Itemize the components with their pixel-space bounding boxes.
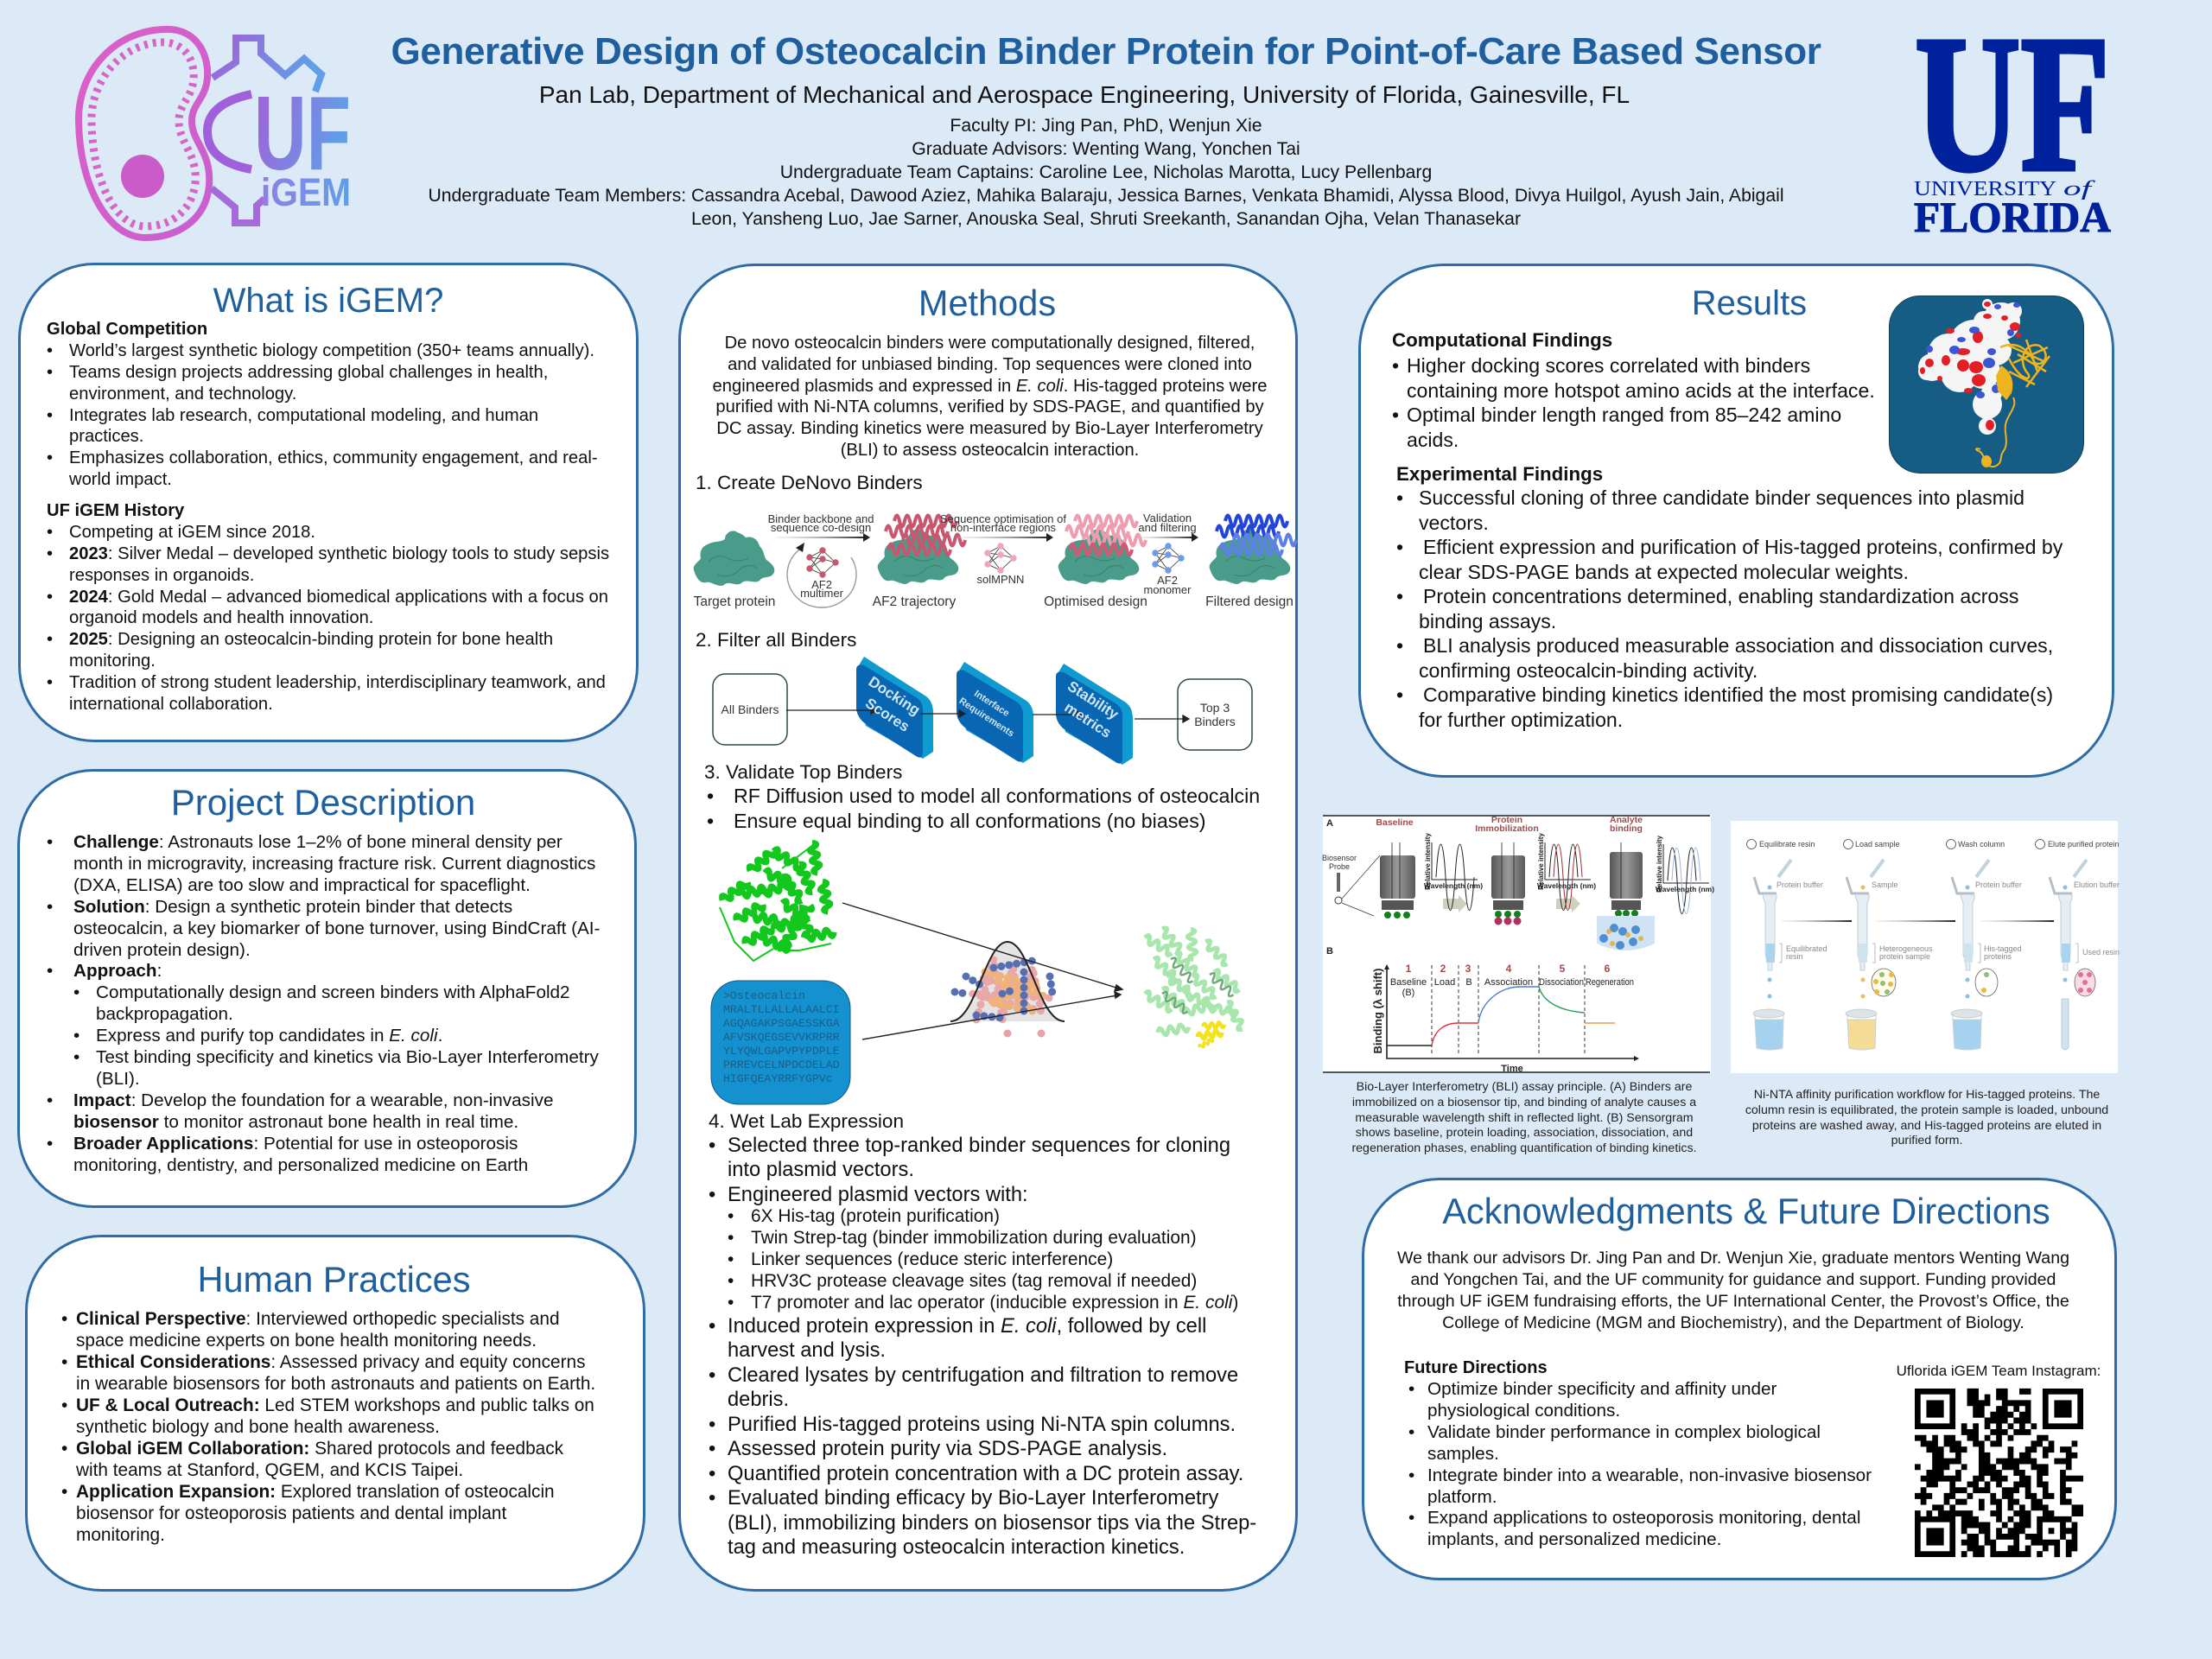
project text: month in microgravity, increasing fracture risk. Current diagnostics [73, 854, 595, 874]
subheading: future directions: Future Directions [1404, 1358, 1548, 1377]
human practices text: Ethical Considerations: Assessed privacy and equity concerns [76, 1352, 585, 1372]
human practices text: Global iGEM Collaboration: Shared protocols and feedback [76, 1439, 563, 1459]
figure: BLI assay principle: B [1465, 977, 1472, 988]
panel: Project Description: • [47, 1134, 53, 1154]
human practices text: with teams at Stanford, QGEM, and KCIS Taipei. [76, 1460, 463, 1480]
list: wet lab steps: Quantified protein concentration with a DC protein assay. [728, 1463, 1243, 1485]
figure: BLI assay principle: Wavelength (nm) [1424, 881, 1483, 890]
project text: backpropagation. [96, 1004, 233, 1024]
figure: BLI assay principle: A [1326, 818, 1333, 829]
list: future directions: Expand applications to osteoporosis monitoring, dental [1427, 1508, 1860, 1528]
human practices text [61, 1309, 595, 1545]
figure: BLI assay principle: Biosensor [1322, 854, 1357, 862]
caption: Ni-NTA: Ni-NTA affinity purification workflow for His-tagged proteins. The [1754, 1088, 2100, 1102]
acknowledgments text: through UF iGEM fundraising efforts, the UF International Center, the Provost’s Office, the [1397, 1292, 2069, 1311]
figure: binder design pipeline: sequence co-design [771, 521, 871, 534]
team credits: Undergraduate Team Captains: Caroline Lee, Nicholas Marotta, Lucy Pellenbarg [780, 162, 1432, 182]
figure: BLI assay principle: Wavelength (nm) [1537, 881, 1596, 890]
figure: BLI assay principle: Relative intensity [1424, 833, 1432, 890]
project text: Test binding specificity and kinetics via Bio-Layer Interferometry [96, 1047, 599, 1067]
subheading: global competition: Global Competition [47, 320, 207, 339]
list: future directions: Validate binder performance in complex biological [1427, 1422, 1821, 1442]
list: computational findings: containing more hotspot amino acids at the interface. [1407, 378, 1875, 401]
project text: (DXA, ELISA) are too slow and impractical for spaceflight. [73, 875, 531, 895]
figure: binder design pipeline [693, 512, 1298, 609]
list: wet lab steps: Evaluated binding efficacy by Bio-Layer Interferometry [728, 1487, 1218, 1510]
figure: Ni-NTA purification workflow [1731, 821, 2118, 1073]
project text: Approach: [73, 961, 162, 981]
figure: BLI assay principle: 6 [1605, 963, 1611, 975]
section: 2 filter binders: 2. Filter all Binders [696, 629, 856, 651]
figure: BLI assay principle: (B) [1402, 988, 1414, 998]
list: computational findings [1407, 353, 1875, 452]
panel: Human Practices: • [61, 1352, 67, 1372]
panel: Results: • [1396, 634, 1403, 657]
panel: What is iGEM: • [47, 544, 53, 563]
figure: binder design pipeline: Binder backbone and [768, 512, 874, 525]
panel: Human Practices: • [61, 1482, 67, 1502]
panel: What is iGEM: • [47, 406, 53, 425]
panel: Acknowledgments and Future Directions: • [1408, 1508, 1414, 1528]
list: wet lab steps: debris. [728, 1389, 789, 1411]
human practices text: Application Expansion: Explored translation of osteocalcin [76, 1482, 555, 1502]
panel: What is iGEM: • [47, 588, 53, 607]
figure: BLI assay principle: Association [1484, 977, 1533, 988]
list: wet lab steps: Assessed protein purity via SDS-PAGE analysis. [728, 1438, 1167, 1460]
panel: Human Practices [25, 1235, 645, 1592]
panel: Human Practices: • [61, 1395, 67, 1415]
project text: driven protein design). [73, 940, 251, 960]
figure: Ni-NTA purification workflow: Equilibrated [1786, 944, 1827, 953]
list: global competition: World’s largest synthetic biology competition (350+ teams annually). [69, 341, 594, 360]
acknowledgments text: We thank our advisors Dr. Jing Pan and Dr. Wenjun Xie, graduate mentors Wenting Wang [1397, 1249, 2069, 1268]
panel: Project Description: • [47, 961, 53, 981]
figure: Ni-NTA purification workflow: His-tagged [1984, 944, 2022, 953]
list: validate bullets: Ensure equal binding to all conformations (no biases) [734, 810, 1206, 832]
figure: structure prediction [709, 834, 1287, 1110]
list: wet lab steps: • [728, 1293, 734, 1313]
panel: Methods [678, 264, 1298, 1592]
list: experimental findings: BLI analysis produced measurable association and dissociation curves, [1423, 634, 2053, 657]
list: experimental findings: for further optimization. [1419, 709, 1623, 731]
figure: binder filter flow: Scores [862, 695, 912, 735]
figure: Ni-NTA purification workflow: Elute purified protein [2048, 840, 2120, 849]
panel: Human Practices: • [61, 1309, 67, 1329]
heading: Methods [918, 283, 1056, 323]
figure: binder design pipeline: Sequence optimisation of [940, 512, 1066, 525]
project text: osteocalcin, a key biomarker of bone turnover, using BindCraft (AI- [73, 918, 600, 938]
team credits: Faculty PI: Jing Pan, PhD, Wenjun Xie [950, 116, 1262, 136]
figure: Ni-NTA purification workflow: protein sample [1879, 952, 1930, 961]
figure: binder filter flow: Binders [1194, 715, 1236, 728]
figure: BLI assay principle: Probe [1329, 862, 1350, 871]
list: global competition: Emphasizes collaboration, ethics, community engagement, and real- [69, 448, 598, 467]
panel: Results: • [1396, 585, 1403, 607]
panel: Results: • [1392, 354, 1399, 377]
project text: • [73, 982, 79, 1002]
caption: BLI [1317, 1080, 1732, 1157]
figure: Ni-NTA purification workflow: Used resin [2082, 948, 2120, 957]
logo: University of Florida: UF [1915, 0, 2110, 212]
panel: Methods: • [709, 1463, 715, 1485]
list: wet lab steps: into plasmid vectors. [728, 1159, 914, 1181]
panel: Project Description [17, 769, 637, 1208]
panel: Methods: • [709, 1364, 715, 1387]
list: future directions: Optimize binder specificity and affinity under [1427, 1379, 1777, 1399]
list: future directions: physiological conditions. [1427, 1401, 1620, 1421]
figure: BLI assay principle: Baseline [1376, 817, 1414, 828]
project text: Impact: Develop the foundation for a wearable, non-invasive [73, 1090, 553, 1110]
acknowledgments text [1362, 1248, 2105, 1334]
project text: monitoring, dentistry, and personalized medicine on Earth [73, 1155, 528, 1175]
human practices text: UF & Local Outreach: Led STEM workshops and public talks on [76, 1395, 594, 1415]
panel: What is iGEM: • [47, 448, 53, 467]
figure: BLI assay principle: Load [1434, 977, 1455, 988]
figure: binder filter flow: metrics [1061, 699, 1115, 741]
figure: BLI assay principle: 5 [1560, 963, 1566, 975]
caption: BLI: Bio-Layer Interferometry (BLI) assay principle. (A) Binders are [1357, 1080, 1692, 1094]
list: history: organoid models and health innovation. [69, 608, 373, 627]
image: protein surface [1889, 296, 2084, 474]
project text [47, 832, 600, 1175]
caption: Ni-NTA [1719, 1088, 2134, 1149]
figure: binder filter flow: Docking [866, 673, 923, 719]
subheading: experimental findings: Experimental Findings [1396, 463, 1603, 485]
figure: binder design pipeline: solMPNN [977, 573, 1024, 586]
figure: binder design pipeline: non-interface regions [950, 521, 1057, 534]
list: history: 2025: Designing an osteocalcin-binding protein for bone health [69, 630, 553, 649]
title: Generative Design of Osteocalcin Binder Protein for Point-of-Care Based Sensor [391, 30, 1821, 73]
list: history: Tradition of strong student leadership, interdisciplinary teamwork, and [69, 673, 606, 692]
team credits: Graduate Advisors: Wenting Wang, Yonchen Tai [912, 139, 1300, 159]
human practices text: monitoring. [76, 1525, 165, 1545]
figure: binder filter flow: Stability [1065, 677, 1122, 723]
figure: BLI assay principle: 2 [1440, 963, 1446, 975]
figure: Ni-NTA purification workflow: Wash column [1958, 840, 2005, 849]
panel: Acknowledgments and Future Directions: • [1408, 1379, 1414, 1399]
list: wet lab steps: HRV3C protease cleavage sites (tag removal if needed) [751, 1271, 1197, 1291]
list: future directions: Integrate binder into a wearable, non-invasive biosensor [1427, 1465, 1872, 1485]
list: future directions [1427, 1379, 1872, 1551]
methods summary: engineered plasmids and expressed in E. coli. His-tagged proteins were [713, 377, 1267, 396]
list: wet lab steps: Selected three top-ranked binder sequences for cloning [728, 1135, 1230, 1157]
project text: biosensor to monitor astronaut bone health in real time. [73, 1112, 518, 1132]
figure: BLI assay principle: Baseline [1390, 977, 1427, 988]
list: validate bullets: RF Diffusion used to model all conformations of osteocalcin [734, 785, 1260, 807]
methods summary: and validated for unbiased binding. Top sequences were cloned into [728, 355, 1252, 374]
heading: Acknowledgments & Future Directions [1442, 1191, 2050, 1231]
human practices text: in wearable biosensors for both astronauts and patients on Earth. [76, 1374, 595, 1394]
logo: University of Florida: FLORIDA [1914, 193, 2111, 241]
panel: Methods: • [709, 1487, 715, 1510]
list: wet lab steps: Induced protein expression in E. coli, followed by cell [728, 1315, 1206, 1338]
list: wet lab steps: • [728, 1228, 734, 1248]
acknowledgments text: and Yongchen Tai, and the UF community for guidance and support. Funding provided [1411, 1270, 2056, 1289]
caption: BLI: measurable wavelength shift in reflected light. (B) Sensorgram [1355, 1111, 1694, 1125]
caption: BLI: regeneration phases, enabling quantification of binding kinetics. [1351, 1141, 1697, 1155]
list: wet lab steps: Purified His-tagged proteins using Ni-NTA spin columns. [728, 1414, 1236, 1436]
list: experimental findings [1419, 486, 2063, 732]
figure: structure prediction: PRREVCELNPDCDELAD [723, 1058, 840, 1071]
list: wet lab steps: tag and measuring osteocalcin interaction kinetics. [728, 1536, 1185, 1559]
methods summary: De novo osteocalcin binders were computationally designed, filtered, [725, 334, 1255, 353]
figure: BLI assay principle: B [1326, 946, 1333, 957]
figure: binder design pipeline: Validation [1143, 512, 1192, 524]
panel: Methods: • [709, 1438, 715, 1460]
list: wet lab steps: Twin Strep-tag (binder immobilization during evaluation) [751, 1228, 1197, 1248]
human practices text: biosensor for osteoporosis patients and dental implant [76, 1503, 506, 1523]
heading: Human Practices [197, 1259, 470, 1300]
figure: binder filter flow: Requirements [957, 696, 1016, 739]
list: history: monitoring. [69, 652, 156, 671]
figure: BLI assay principle: 4 [1506, 963, 1512, 975]
figure: binder design pipeline: Optimised design [1044, 594, 1147, 609]
panel: Methods: • [709, 1184, 715, 1206]
figure: BLI assay principle: Relative intensity [1656, 836, 1663, 893]
methods summary: (BLI) to assess osteocalcin interaction. [841, 441, 1139, 460]
list: validate bullets [707, 785, 1260, 832]
caption: BLI: shows baseline, protein loading, association, dissociation, and [1356, 1126, 1693, 1140]
affiliation: Pan Lab, Department of Mechanical and Aerospace Engineering, University of Florida, Gainesville, FL [539, 81, 1630, 108]
list: wet lab steps: 6X His-tag (protein purification) [751, 1206, 1000, 1226]
figure: Ni-NTA purification workflow: Heterogeneous [1879, 944, 1933, 953]
heading: What is iGEM? [213, 282, 443, 320]
panel: Methods: • [709, 1414, 715, 1436]
panel: Results: • [1392, 404, 1399, 426]
logo: UF iGEM: iGEM [261, 170, 351, 214]
methods summary: DC assay. Binding kinetics were measured by Bio-Layer Interferometry [716, 419, 1263, 438]
panel: What is iGEM [18, 263, 639, 742]
logo: University of Florida: UNIVERSITY [1914, 178, 2056, 200]
panel: What is iGEM: • [47, 673, 53, 692]
section: 3 validate binders: 3. Validate Top Binders [704, 761, 902, 783]
panel: What is iGEM: • [47, 630, 53, 649]
subheading: computational findings: Computational Findings [1392, 329, 1612, 351]
panel: Methods: • [707, 785, 714, 807]
panel: What is iGEM: • [47, 523, 53, 542]
figure: binder design pipeline: Filtered design [1205, 594, 1294, 609]
list: experimental findings: Successful cloning of three candidate binder sequences into plasmid [1419, 486, 2024, 509]
list: computational findings: Optimal binder length ranged from 85–242 amino [1407, 404, 1841, 426]
panel: Project Description: • [47, 1090, 53, 1110]
figure: binder filter flow [712, 657, 1253, 765]
figure: structure prediction: AFVSKQEGSEVVKRPRR [723, 1031, 840, 1044]
panel: Methods: • [709, 1135, 715, 1157]
figure: binder filter flow: Top 3 [1200, 701, 1230, 715]
list: wet lab steps: Cleared lysates by centrifugation and filtration to remove [728, 1364, 1238, 1387]
list: wet lab steps [728, 1134, 1256, 1560]
list: history: international collaboration. [69, 695, 273, 714]
caption: Ni-NTA: purified form. [1891, 1134, 1962, 1147]
caption: BLI: immobilized on a biosensor tip, and binding of analyte causes a [1352, 1096, 1696, 1109]
panel: What is iGEM: • [47, 363, 53, 382]
list: future directions: platform. [1427, 1487, 1497, 1507]
list: wet lab steps: • [728, 1206, 734, 1226]
heading: Results [1692, 284, 1807, 322]
list: experimental findings: Efficient expression and purification of His-tagged proteins, confirmed by [1423, 536, 2063, 558]
figure: binder design pipeline: Target protein [694, 594, 775, 609]
figure: BLI assay principle: Protein [1491, 815, 1522, 825]
project text: • [73, 1026, 79, 1046]
list: global competition: Teams design projects addressing global challenges in health, [69, 363, 548, 382]
project text: • [73, 1047, 79, 1067]
list: wet lab steps: T7 promoter and lac operator (inducible expression in E. coli) [751, 1293, 1238, 1313]
figure: BLI assay principle: Wavelength (nm) [1656, 885, 1714, 893]
figure: BLI assay principle: 3 [1465, 963, 1471, 975]
figure: structure prediction: MRALTLLALLALAALCI [723, 1003, 840, 1016]
list: history: 2023: Silver Medal – developed synthetic biology tools to study sepsis [69, 544, 609, 563]
figure: structure prediction: YLYQWLGAPVPYPDPLE [723, 1045, 840, 1058]
list: wet lab steps: • [728, 1271, 734, 1291]
figure: binder design pipeline: AF2 [1157, 574, 1178, 587]
list: global competition: environment, and technology. [69, 385, 296, 404]
figure: Ni-NTA purification workflow: Protein buffer [1975, 880, 2022, 889]
QR code [1914, 1389, 2084, 1557]
figure: BLI assay principle [1323, 815, 1711, 1073]
figure: binder filter flow: All Binders [721, 702, 779, 716]
acknowledgments text: College of Medicine (MGM and Biochemistry), and the Department of Biology. [1442, 1313, 2024, 1332]
list: future directions: samples. [1427, 1444, 1499, 1464]
project text: Challenge: Astronauts lose 1–2% of bone mineral density per [73, 832, 563, 852]
list: wet lab steps: • [728, 1249, 734, 1269]
team credits [428, 116, 1784, 229]
caption: Ni-NTA: proteins are washed away, and His-tagged proteins are eluted in [1752, 1119, 2101, 1133]
logo: University of Florida [1914, 0, 2112, 241]
figure: Ni-NTA purification workflow: proteins [1984, 952, 2012, 961]
list: experimental findings: Comparative binding kinetics identified the most promising candidate(s) [1423, 683, 2053, 706]
human practices text: Clinical Perspective: Interviewed orthopedic specialists and [76, 1309, 560, 1329]
list: computational findings: Higher docking scores correlated with binders [1407, 354, 1810, 377]
project text: Computationally design and screen binders with AlphaFold2 [96, 982, 570, 1002]
figure: structure prediction: HIGFQEAYRRFYGPVc [723, 1072, 833, 1085]
methods summary: purified with Ni-NTA columns, verified by SDS-PAGE, and quantified by [715, 397, 1264, 416]
project text: Solution: Design a synthetic protein binder that detects [73, 897, 512, 917]
subheading: UF iGEM history: UF iGEM History [47, 501, 184, 520]
human practices text: synthetic biology and bone health awareness. [76, 1417, 440, 1437]
figure: structure prediction: >Osteocalcin [723, 989, 805, 1002]
project text: (BLI). [96, 1069, 140, 1089]
panel: Project Description: • [47, 897, 53, 917]
figure: binder design pipeline: AF2 trajectory [873, 594, 956, 609]
list: wet lab steps: harvest and lysis. [728, 1339, 886, 1362]
list: global competition: Integrates lab research, computational modeling, and human [69, 406, 538, 425]
heading: Project Description [171, 782, 475, 823]
section: 1 create binders: 1. Create DeNovo Binders [696, 472, 923, 493]
list: global competition: world impact. [69, 470, 172, 489]
figure: binder design pipeline: and filtering [1138, 521, 1197, 534]
figure: binder design pipeline: multimer [800, 587, 844, 600]
figure: Ni-NTA purification workflow: Load sample [1855, 840, 1900, 849]
list: wet lab steps: Engineered plasmid vectors with: [728, 1184, 1028, 1206]
panel: Human Practices: • [61, 1439, 67, 1459]
list: wet lab steps: Linker sequences (reduce steric interference) [751, 1249, 1113, 1269]
list: history: Competing at iGEM since 2018. [69, 523, 315, 542]
figure: Ni-NTA purification workflow: resin [1786, 952, 1803, 961]
list: experimental findings: clear SDS-PAGE bands at expected molecular weights. [1419, 560, 1909, 582]
figure: binder design pipeline: monomer [1144, 583, 1192, 596]
team credits: Leon, Yansheng Luo, Jae Sarner, Anouska Seal, Shruti Sreekanth, Sanandan Ojha, Velan Thanasekar [691, 209, 1521, 229]
figure: BLI assay principle: Analyte [1610, 815, 1643, 825]
logo: UF iGEM [75, 26, 351, 241]
figure: structure prediction: AGQAGAKPSGAESSKGA [723, 1017, 840, 1030]
list: experimental findings: Protein concentrations determined, enabling standardization across [1423, 585, 2018, 607]
panel: Results: • [1396, 536, 1403, 558]
figure: BLI assay principle: Time [1501, 1064, 1523, 1074]
list: experimental findings: vectors. [1419, 512, 1489, 534]
figure: Ni-NTA purification workflow: Elution buffer [2074, 880, 2120, 889]
section: 4 wet lab: 4. Wet Lab Expression [709, 1110, 904, 1132]
project text: Broader Applications: Potential for use in osteoporosis [73, 1134, 518, 1154]
panel: Acknowledgments and Future Directions: • [1408, 1465, 1414, 1485]
list: future directions: implants, and personalized medicine. [1427, 1529, 1721, 1549]
figure: BLI assay principle: Binding (λ shift) [1371, 969, 1384, 1053]
list: history: responses in organoids. [69, 566, 254, 585]
panel: Project Description: • [47, 832, 53, 852]
figure: binder design pipeline: AF2 [811, 578, 832, 591]
methods summary [713, 334, 1267, 460]
panel: Results: • [1396, 486, 1403, 509]
figure: BLI assay principle: 1 [1406, 963, 1412, 975]
list: wet lab steps: (BLI), immobilizing binders on biosensor tips via the Strep- [728, 1512, 1256, 1535]
figure: BLI assay principle: Dissociation [1539, 977, 1584, 988]
panel: Methods: • [707, 810, 714, 832]
figure: BLI assay principle: Immobilization [1475, 823, 1539, 834]
figure: Ni-NTA purification workflow: Equilibrate resin [1759, 840, 1815, 849]
panel: What is iGEM: • [47, 341, 53, 360]
caption: Ni-NTA: column resin is equilibrated, the protein sample is loaded, unbound [1745, 1103, 2108, 1117]
project text: Express and purify top candidates in E. coli. [96, 1026, 442, 1046]
instagram label: Uflorida iGEM Team Instagram: [1897, 1363, 2101, 1379]
figure: Ni-NTA purification workflow: Protein buffer [1777, 880, 1823, 889]
figure: Ni-NTA purification workflow: Sample [1872, 880, 1898, 889]
list: history: 2024: Gold Medal – advanced biomedical applications with a focus on [69, 588, 608, 607]
human practices text: space medicine experts on bone health monitoring needs. [76, 1331, 537, 1351]
panel: Acknowledgments and Future Directions: • [1408, 1422, 1414, 1442]
figure: BLI assay principle: binding [1610, 823, 1643, 834]
figure: BLI assay principle: Relative intensity [1537, 833, 1545, 890]
figure: binder filter flow: Interface [972, 689, 1011, 719]
panel: Acknowledgments and Future Directions [1362, 1178, 2117, 1580]
list: global competition: practices. [69, 427, 143, 446]
logo: UF iGEM: UF [254, 74, 351, 192]
list: experimental findings: confirming osteocalcin-binding activity. [1419, 658, 1758, 681]
panel: Methods: • [709, 1315, 715, 1338]
panel: Results [1358, 264, 2114, 778]
list: global competition [47, 341, 598, 489]
list: computational findings: acids. [1407, 429, 1459, 451]
list: history [47, 523, 609, 714]
team credits: Undergraduate Team Members: Cassandra Acebal, Dawood Aziez, Mahika Balaraju, Jessica Barnes, Venkata Bhamidi, Alyssa Blood, Divya Huilgol, Ayush Jain, Abigail [428, 186, 1784, 206]
panel: Results: • [1396, 683, 1403, 706]
figure: BLI assay principle: Regeneration [1586, 977, 1634, 988]
list: experimental findings: binding assays. [1419, 610, 1556, 632]
logo: University of Florida: of [2063, 178, 2096, 200]
